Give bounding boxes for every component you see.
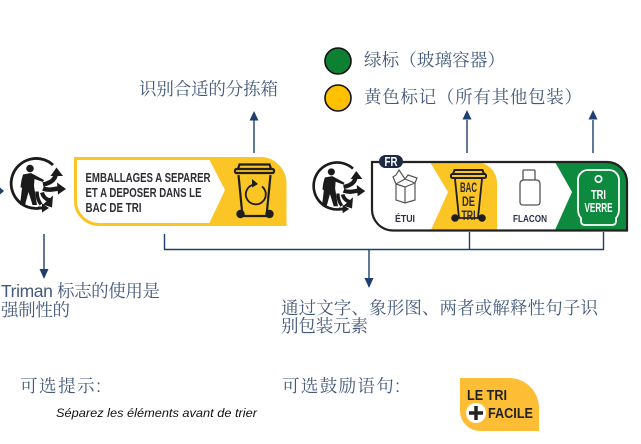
- text: etui: ÉTUI: [395, 212, 415, 225]
- arrow: to bin pictogram: [462, 110, 472, 153]
- text: Triman mandatory: [1, 281, 160, 320]
- arrow: Triman mandatory: [40, 234, 48, 279]
- legend: yellow mark: [325, 85, 582, 111]
- text: Triman mandatory: Triman 标志的使用是: [1, 281, 160, 301]
- text: optional tip heading: 可选提示:: [20, 376, 101, 396]
- arrow: to bin info: [250, 111, 258, 153]
- text: sorting instruction: EMBALLAGES A SEPARER: [86, 171, 210, 185]
- badge: FR: [379, 155, 403, 169]
- text: bac de tri: TRI: [462, 208, 476, 223]
- text: identify packaging elements: 别包装元素: [281, 316, 368, 336]
- text: optional slogan heading: 可选鼓励语句:: [282, 376, 400, 396]
- arrow: to green mark: [588, 110, 598, 153]
- text: Triman mandatory: 强制性的: [1, 300, 70, 320]
- text: optional tip: Séparez les éléments avant de trier: [56, 408, 258, 420]
- icon: bin with text: [451, 170, 486, 222]
- text: bac de tri: BAC: [460, 180, 477, 195]
- text: identify packaging elements: 通过文字、象形图、两者或解释性句子识: [281, 298, 598, 318]
- outline: [372, 162, 627, 230]
- panel: packaging label: [372, 155, 627, 230]
- text: identify packaging elements: [281, 298, 598, 336]
- icon: carton box: [393, 170, 417, 203]
- legend: green mark: [325, 48, 505, 74]
- text: tri verre: VERRE: [584, 200, 613, 215]
- segment: yellow bin: [430, 162, 497, 230]
- badge: FR: FR: [384, 155, 398, 169]
- text: bac de tri: [460, 180, 477, 223]
- bracket with arrow: [164, 232, 604, 288]
- text: tri verre: [584, 187, 613, 215]
- arrow: left edge stub: [0, 188, 4, 194]
- text: flacon: FLACON: [513, 213, 547, 225]
- segment: green glass: [555, 162, 627, 230]
- text: sorting instruction: [86, 171, 210, 215]
- badge: le tri facile: LE TRI: [467, 388, 507, 404]
- badge: le tri facile: FACILE: [488, 406, 533, 422]
- badge: le tri facile: [460, 378, 539, 431]
- legend: green mark: 绿标（玻璃容器）: [364, 50, 505, 70]
- text: sorting instruction: ET A DEPOSER DANS LE: [86, 186, 202, 200]
- icon: recycling bin: [235, 164, 274, 218]
- icon: Triman left: [11, 158, 66, 212]
- text: sorting instruction: BAC DE TRI: [86, 201, 142, 215]
- panel: bin info label: [76, 157, 286, 226]
- icon: bottle: [520, 170, 540, 205]
- text: bac de tri: DE: [462, 194, 475, 209]
- icon: Triman right: [314, 162, 365, 213]
- legend: yellow mark: 黄色标记（所有其他包装）: [364, 87, 582, 107]
- text: tri verre: TRI: [591, 187, 606, 202]
- heading: find the right bin: 识别合适的分拣箱: [139, 79, 278, 99]
